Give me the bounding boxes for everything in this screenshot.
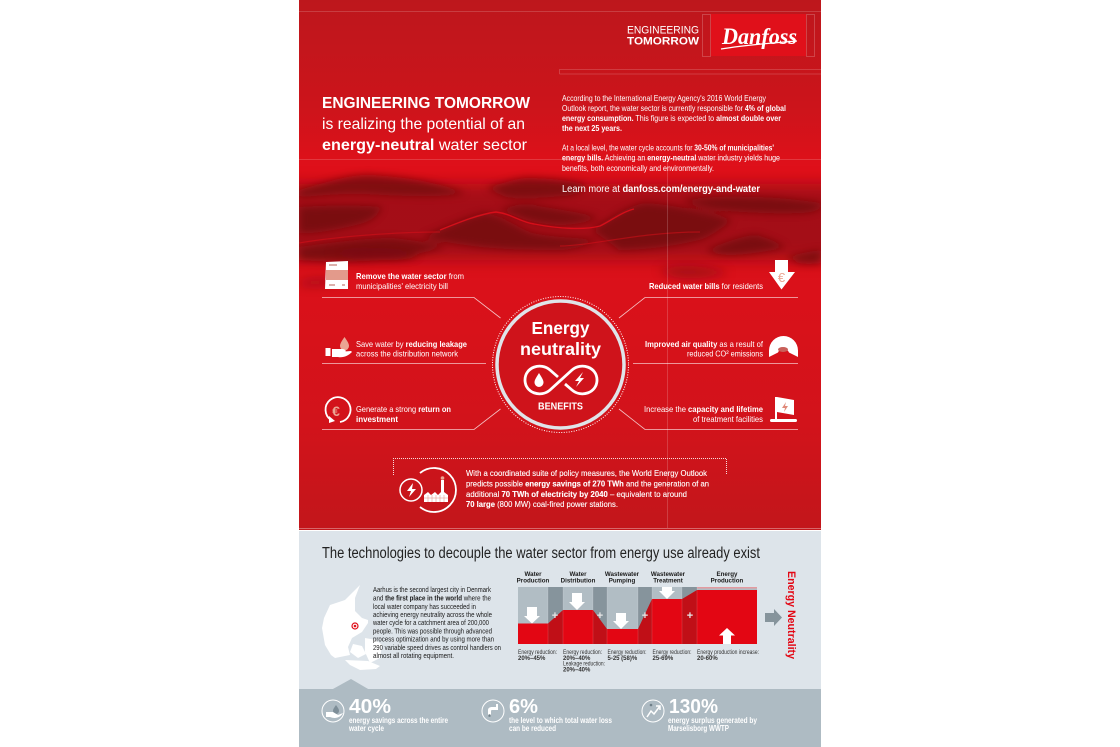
map: Denmark xyxy=(322,585,382,670)
stage headers: Pumping xyxy=(609,578,635,584)
plus signs: + xyxy=(552,610,558,622)
stage headers: Water xyxy=(525,571,542,578)
benefit: capacity and lifetime xyxy=(644,397,797,424)
stage reductions: Energy reduction: xyxy=(563,650,602,656)
icon: tap xyxy=(482,700,504,722)
stat: 40 percent xyxy=(322,696,448,733)
callout: world energy outlook: 70 large (800 MW) coal-fired power stations. xyxy=(466,499,618,509)
stage reductions: Leakage reduction: xyxy=(563,662,605,668)
benefit: save water xyxy=(326,337,467,358)
stat: 40 percent: 40% xyxy=(349,696,391,718)
benefit: save water: Save water by reducing leakage xyxy=(356,339,467,349)
icon: hand with drop xyxy=(322,700,344,722)
stage headers: Wastewater xyxy=(605,571,640,578)
text block: introduction: Learn more at danfoss.com/energy-and-water xyxy=(562,184,760,195)
stage reductions: 5-25 (58)% xyxy=(608,656,638,662)
text block: Aarhus: water cycle for a catchment area of 200,000 xyxy=(372,618,489,627)
logo: Engineering Tomorrow and Danfoss: Danfoss xyxy=(721,24,797,49)
stage reductions: 20-60% xyxy=(697,656,718,662)
benefit: return on investment: Generate a strong return on xyxy=(356,404,451,414)
benefit: capacity and lifetime: Increase the capacity and lifetime xyxy=(644,404,763,414)
benefit: reduced water bills: Reduced water bills for residents xyxy=(649,281,763,291)
benefit: remove water sector from bill xyxy=(325,261,464,291)
stage headers xyxy=(517,571,744,584)
arrow: to energy neutrality xyxy=(765,609,782,626)
text block: Aarhus: people. This was possible through advanced xyxy=(373,626,492,636)
stat: 6 percent: 6% xyxy=(509,696,538,718)
chart plot xyxy=(518,587,757,644)
heading: The technologies to decouple the water sector from energy use already exist xyxy=(322,545,761,562)
text block: introduction: According to the International Energy Agency's 2016 World Energy xyxy=(562,93,767,103)
central badge: energy neutrality: BENEFITS xyxy=(538,402,583,412)
logo: Engineering Tomorrow and Danfoss: ENGINEERING xyxy=(627,24,699,36)
stat: 130 percent: energy surplus generated by xyxy=(668,716,757,725)
panel: red hero background xyxy=(280,0,840,530)
plus signs: + xyxy=(642,610,648,622)
benefit: improved air quality xyxy=(645,336,798,358)
benefit: save water: across the distribution network xyxy=(356,348,459,358)
stage headers: Treatment xyxy=(653,578,683,584)
text block: introduction: At a local level, the water cycle accounts for 30-50% of municipalities' xyxy=(562,142,774,152)
text block: Aarhus: process optimization and by using more than xyxy=(373,634,494,644)
central badge: energy neutrality xyxy=(492,296,628,432)
stage headers: Production xyxy=(517,578,550,584)
stat: 6 percent: the level to which total water loss xyxy=(509,716,612,725)
icon: infinity xyxy=(525,366,597,394)
text block: introduction: Outlook report, the water sector is currently responsible for 4% of global xyxy=(562,103,786,113)
text block: introduction xyxy=(562,93,786,195)
text block: introduction: energy bills. Achieving an energy-neutral water industry yields huge xyxy=(562,152,780,162)
callout: world energy outlook: With a coordinated suite of policy measures, the World Energy Outlook xyxy=(466,468,708,478)
central badge: energy neutrality: Energy xyxy=(532,318,590,338)
plus signs xyxy=(552,610,693,622)
text block: Aarhus: almost all rotating equipment. xyxy=(373,651,454,660)
logo: Engineering Tomorrow and Danfoss xyxy=(627,14,814,56)
text block: introduction: the next 25 years. xyxy=(562,123,622,133)
title: ENGINEERING TOMORROW xyxy=(322,95,531,112)
stage headers: Distribution xyxy=(561,578,596,584)
text block: Aarhus: achieving energy neutrality across the whole xyxy=(373,610,492,619)
text block: Aarhus: 290 variable speed drives as control handlers on xyxy=(373,643,501,652)
text block: Aarhus xyxy=(372,585,501,660)
stage reductions: 20%–40% xyxy=(563,668,591,674)
stat: 130 percent: Marselisborg WWTP xyxy=(668,724,730,733)
stat: 130 percent: 130% xyxy=(669,696,718,718)
stage headers: Water xyxy=(570,571,587,578)
benefit: improved air quality: Improved air quality as a result of xyxy=(645,339,764,349)
stage headers: Production xyxy=(711,578,744,584)
central badge: energy neutrality: neutrality xyxy=(520,339,601,359)
icon: hand with drop xyxy=(326,337,352,357)
text block: Aarhus: and the first place in the world where the xyxy=(373,594,491,602)
benefit: improved air quality: reduced CO² emissions xyxy=(687,348,763,358)
label: energy neutrality: Energy Neutrality xyxy=(785,571,797,660)
callout: world energy outlook: predicts possible energy savings of 270 TWh and the generation of an xyxy=(466,478,709,488)
stat: 40 percent: water cycle xyxy=(348,724,384,733)
plus signs: + xyxy=(597,610,603,622)
title xyxy=(322,95,531,154)
text block: introduction: energy consumption. This figure is expected to almost double over xyxy=(562,113,782,123)
panel: technologies section xyxy=(299,528,821,689)
benefit: return on investment: investment xyxy=(356,414,398,424)
icon: power plant xyxy=(400,468,456,512)
connector lines xyxy=(322,298,798,430)
icon: down arrow with euro: € xyxy=(778,270,786,285)
title: energy-neutral water sector xyxy=(322,137,528,154)
stage reductions xyxy=(518,650,759,674)
stat: 6 percent: can be reduced xyxy=(509,724,556,733)
stage reductions: Energy reduction: xyxy=(652,650,692,656)
stage headers: Wastewater xyxy=(651,571,686,578)
text block: Aarhus: local water company has succeeded in xyxy=(373,602,476,611)
stage headers: Energy xyxy=(717,571,738,578)
stage reductions: Energy reduction: xyxy=(518,650,557,656)
title: is realizing the potential of an xyxy=(322,116,525,133)
stage reductions: 20%–40% xyxy=(563,656,591,662)
callout: world energy outlook: additional 70 TWh of electricity by 2040 – equivalent to around xyxy=(466,489,687,499)
benefit: return on investment xyxy=(326,397,451,424)
icon: down arrow with euro xyxy=(769,260,795,290)
stage reductions: Energy reduction: xyxy=(608,650,647,656)
plus signs: + xyxy=(687,610,693,622)
benefit: remove water sector from bill: municipalities' electricity bill xyxy=(356,281,448,291)
benefit: reduced water bills xyxy=(649,260,795,291)
stage reductions: 25-69% xyxy=(652,656,674,662)
icon: flag xyxy=(770,397,797,422)
arrows: down and up xyxy=(524,587,735,644)
icon: euro return: € xyxy=(332,403,340,419)
icon: air dome xyxy=(769,336,798,357)
stage reductions: 20%–45% xyxy=(518,656,546,662)
chart: energy reduction stages xyxy=(517,571,759,674)
icon: bill xyxy=(325,261,348,289)
logo: Engineering Tomorrow and Danfoss: TOMORROW xyxy=(627,36,700,48)
stat: 130 percent xyxy=(642,696,757,733)
benefit: remove water sector from bill: Remove the water sector from xyxy=(356,271,464,281)
stat: 40 percent: energy savings across the entire xyxy=(349,716,448,725)
callout: world energy outlook xyxy=(394,458,726,512)
text block: introduction: benefits, both economically and environmentally. xyxy=(562,163,714,173)
stat: 6 percent xyxy=(482,696,612,733)
stage reductions: Energy production increase: xyxy=(697,650,759,656)
icon: rising chart xyxy=(642,700,664,722)
panel: key stats xyxy=(299,679,821,747)
benefit: capacity and lifetime: of treatment facilities xyxy=(693,414,763,424)
text block: Aarhus: Aarhus is the second largest city in Denmark xyxy=(373,585,491,594)
